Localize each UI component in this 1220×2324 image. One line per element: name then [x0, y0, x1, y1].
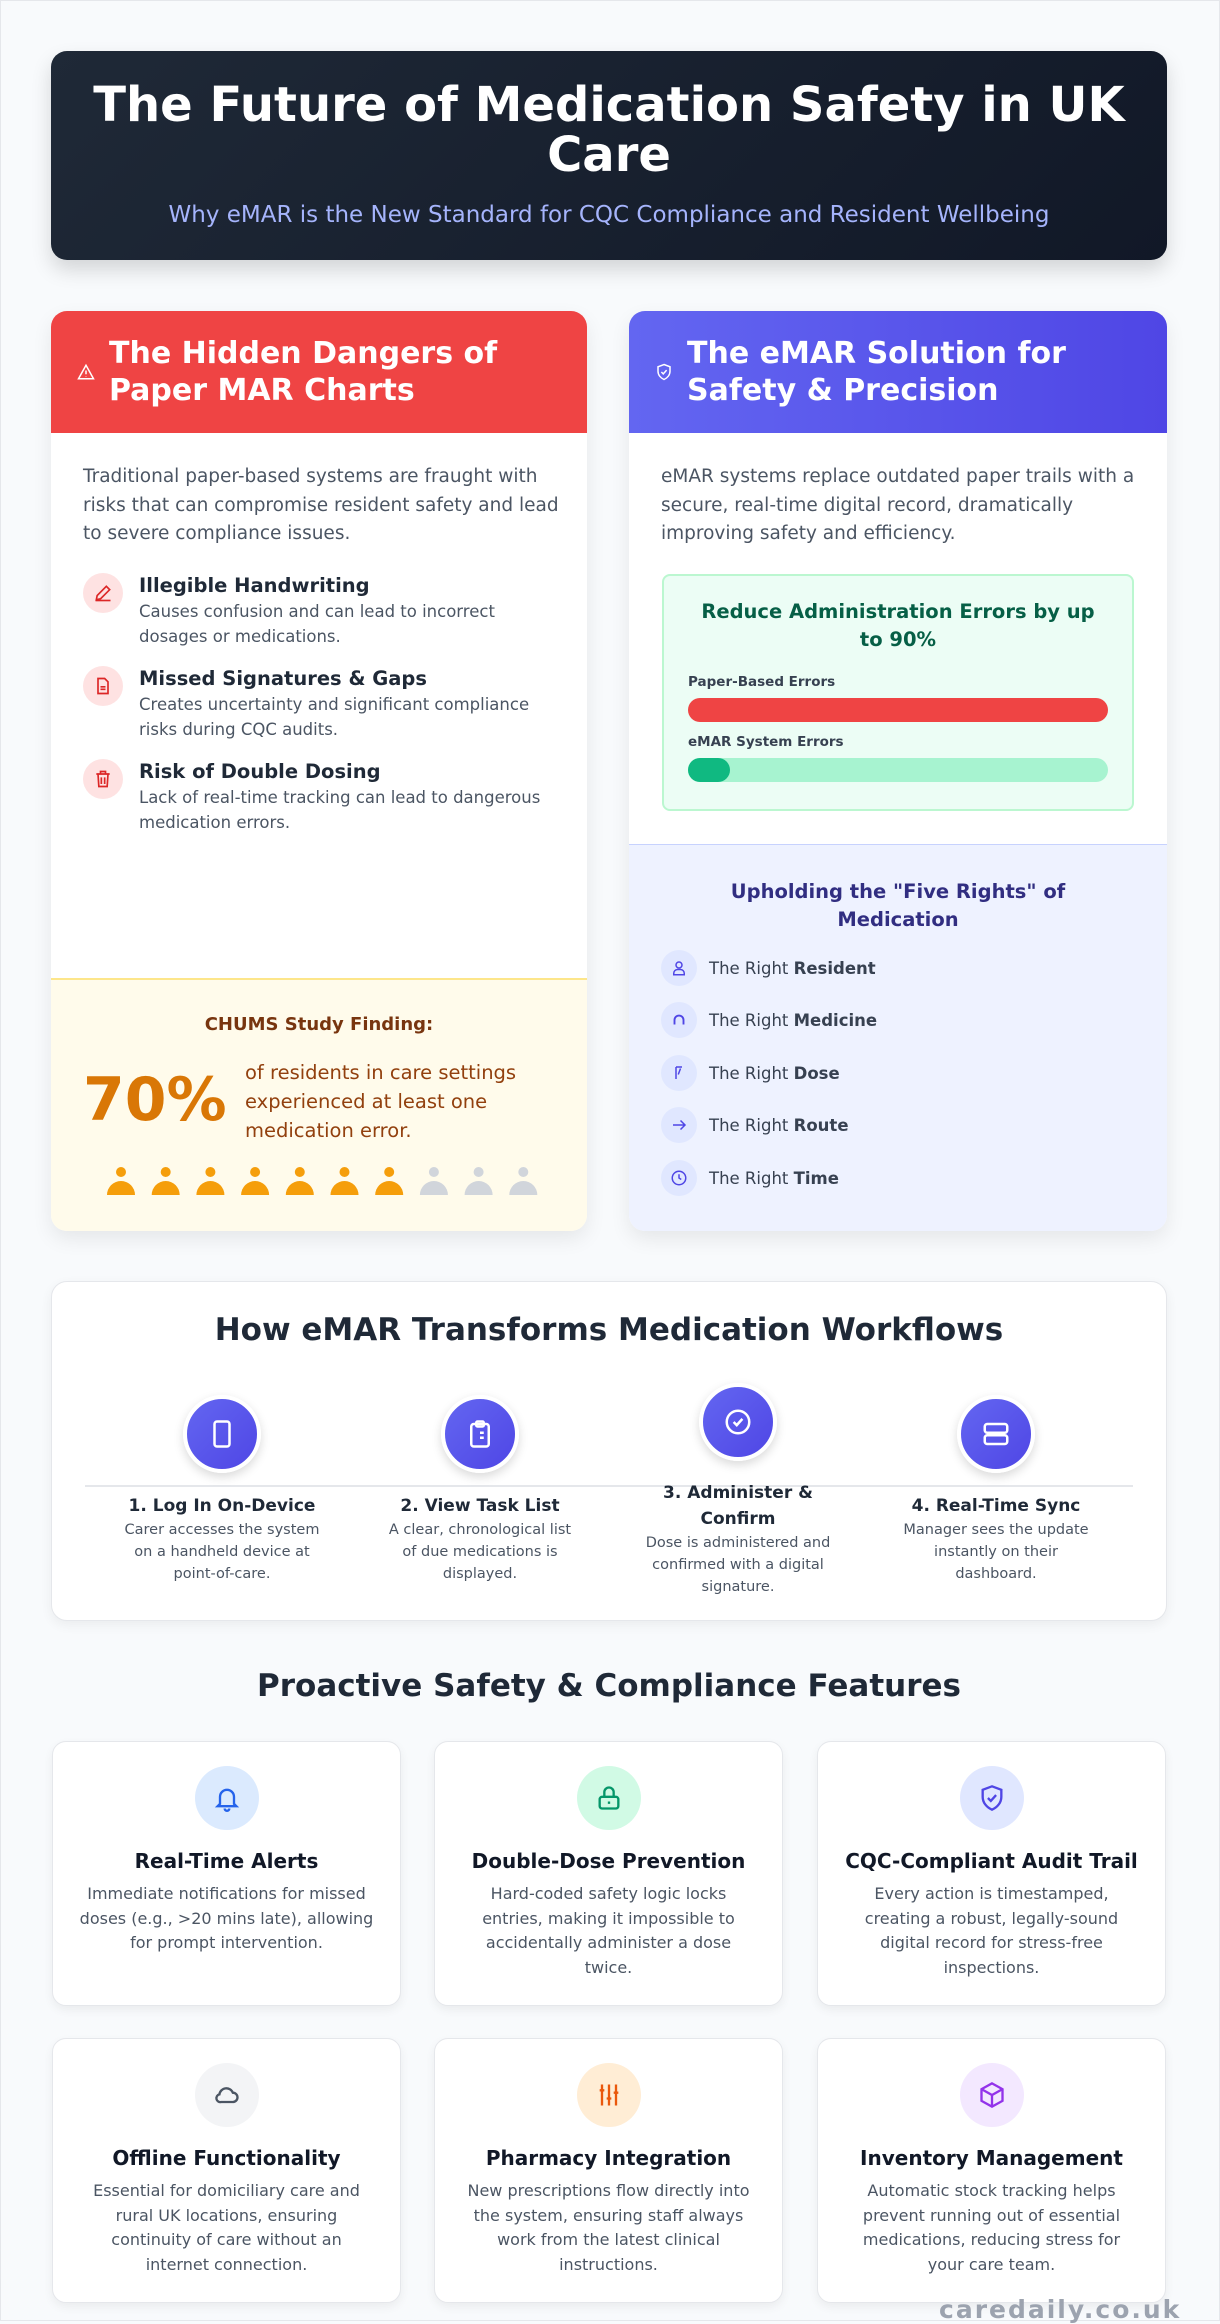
- right: time: The Right: [709, 1168, 788, 1188]
- step 3: Confirm: [701, 1509, 775, 1529]
- right: dose: Dose: [794, 1064, 840, 1082]
- feature: real-time alerts: [52, 1741, 401, 2006]
- feature: inventory: your care team.: [928, 2254, 1055, 2274]
- stat description: of residents in care settings experienced at least one medication error.: [245, 1061, 516, 1142]
- bar: eMAR: eMAR System Errors: [688, 734, 844, 750]
- panel: dangers of paper MAR: [51, 311, 587, 1231]
- item: missed signatures: [83, 666, 529, 739]
- step 3: 3. Administer &: [663, 1483, 813, 1503]
- section: five rights: [629, 844, 1167, 1231]
- panel: eMAR solution: [629, 311, 1167, 1231]
- feature: audit trail: digital record for stress-free: [880, 1933, 1103, 1952]
- feature: double-dose prevention: Hard-coded safety logic locks: [491, 1884, 726, 1903]
- step 3: [646, 1387, 830, 1595]
- bar: paper-based: Paper-Based Errors: [688, 674, 835, 690]
- step 3: Dose is administered and confirmed with a digital signature.: [646, 1535, 830, 1595]
- step 2: A clear, chronological list of due medications is displayed.: [389, 1522, 571, 1582]
- panel header: dangers: [51, 311, 587, 433]
- feature: offline: rural UK locations, ensuring: [116, 2206, 337, 2224]
- section title: Upholding the "Five Rights" of Medication: [731, 880, 1065, 931]
- feature: offline: continuity of care without an: [111, 2230, 342, 2249]
- feature: pharmacy integration: instructions.: [559, 2254, 658, 2274]
- feature: inventory: medications, reducing stress for: [863, 2230, 1120, 2249]
- right: dose: The Right: [709, 1064, 788, 1082]
- intro text: eMAR systems replace outdated paper trails with a secure, real-time digital record, dramatically improving safety and efficiency.: [661, 466, 1134, 544]
- feature: offline: internet connection.: [146, 2254, 307, 2274]
- step 1: 1. Log In On-Device: [129, 1496, 315, 1516]
- chart title: to 90%: [860, 628, 936, 651]
- item: illegible handwriting: [83, 573, 495, 646]
- callout heading: CHUMS Study Finding:: [205, 1014, 433, 1035]
- feature: real-time alerts: Immediate notifications for missed: [87, 1884, 366, 1903]
- title: The Future of Medication Safety in UK Care: [93, 77, 1125, 183]
- panel: workflow: [51, 1281, 1167, 1621]
- right: time: [661, 1160, 839, 1196]
- watermark: caredaily.co.uk: [939, 2295, 1181, 2324]
- panel header: dangers: Paper MAR Charts: [109, 373, 415, 408]
- item: missed signatures: Missed Signatures & Gaps: [139, 667, 427, 690]
- header banner: [51, 51, 1167, 260]
- feature: inventory: Automatic stock tracking helps: [867, 2181, 1116, 2200]
- feature: audit trail: inspections.: [944, 1958, 1039, 1976]
- right: dose: [661, 1055, 840, 1091]
- step 4: 4. Real-Time Sync: [912, 1496, 1080, 1516]
- chart title: Reduce Administration Errors by up: [701, 600, 1095, 623]
- stat: 70%: 70%: [83, 1065, 227, 1135]
- right: medicine: Medicine: [794, 1010, 877, 1030]
- feature: inventory: prevent running out of essential: [863, 2206, 1120, 2224]
- right: medicine: The Right: [709, 1010, 788, 1030]
- panel header: dangers: The Hidden Dangers of: [109, 336, 497, 371]
- right: route: [661, 1107, 849, 1143]
- right: resident: [661, 950, 876, 986]
- pictogram: 7 of 10 people: [107, 1167, 538, 1195]
- feature: inventory: Inventory Management: [860, 2146, 1123, 2170]
- feature: real-time alerts: for prompt intervention.: [130, 1933, 323, 1952]
- item: illegible handwriting: Illegible Handwriting: [139, 574, 370, 597]
- item: illegible handwriting: Causes confusion and can lead to incorrect dosages or medications.: [139, 602, 495, 646]
- right: medicine: [661, 1002, 877, 1038]
- feature: double-dose prevention: twice.: [585, 1958, 632, 1976]
- right: resident: The Right: [709, 958, 788, 978]
- feature: offline: Offline Functionality: [112, 2146, 341, 2170]
- feature: audit trail: creating a robust, legally-sound: [865, 1908, 1118, 1928]
- callout: CHUMS study: [51, 978, 587, 1231]
- feature: pharmacy integration: work from the latest clinical: [497, 2230, 720, 2249]
- intro text: Traditional paper-based systems are fraught with risks that can compromise resident safety and lead to severe compliance issues.: [83, 466, 559, 544]
- feature: audit trail: [817, 1741, 1166, 2006]
- bar: eMAR: [688, 734, 1108, 782]
- item: missed signatures: Creates uncertainty and significant compliance risks during CQC audits.: [139, 695, 529, 739]
- feature: real-time alerts: doses (e.g., >20 mins late), allowing: [80, 1908, 373, 1928]
- feature: double-dose prevention: [434, 1741, 783, 2006]
- panel header: solution: Safety & Precision: [687, 373, 998, 408]
- feature: double-dose prevention: accidentally administer a dose: [486, 1933, 731, 1952]
- right: route: Route: [794, 1116, 849, 1134]
- bar: paper-based: [688, 674, 1108, 722]
- feature: real-time alerts: Real-Time Alerts: [135, 1849, 318, 1873]
- feature: pharmacy integration: [434, 2038, 783, 2303]
- feature: pharmacy integration: New prescriptions flow directly into: [467, 2181, 750, 2200]
- feature: pharmacy integration: Pharmacy Integration: [486, 2146, 731, 2170]
- step 4: Manager sees the update instantly on their dashboard.: [903, 1522, 1089, 1582]
- right: time: Time: [794, 1168, 839, 1188]
- features heading: Proactive Safety & Compliance Features: [257, 1668, 961, 1704]
- feature: inventory: [817, 2038, 1166, 2303]
- feature: offline: Essential for domiciliary care and: [93, 2181, 360, 2200]
- step 2: [389, 1399, 571, 1582]
- subtitle: Why eMAR is the New Standard for CQC Compliance and Resident Wellbeing: [169, 202, 1049, 228]
- feature: offline: [52, 2038, 401, 2303]
- panel header: solution: [629, 311, 1167, 433]
- feature: pharmacy integration: the system, ensuring staff always: [474, 2206, 743, 2224]
- right: route: The Right: [709, 1116, 788, 1134]
- step 1: [125, 1399, 319, 1582]
- feature: double-dose prevention: Double-Dose Prevention: [472, 1849, 745, 1873]
- feature: audit trail: CQC-Compliant Audit Trail: [845, 1849, 1138, 1873]
- chart title: [701, 600, 1095, 651]
- right: resident: Resident: [794, 958, 876, 978]
- feature: audit trail: Every action is timestamped,: [874, 1884, 1109, 1903]
- step 2: 2. View Task List: [400, 1496, 560, 1516]
- item: double dosing: [83, 759, 540, 832]
- step 4: [903, 1399, 1089, 1582]
- item: double dosing: Risk of Double Dosing: [139, 760, 381, 783]
- step 1: Carer accesses the system on a handheld device at point-of-care.: [125, 1522, 319, 1582]
- chart: error reduction: [662, 574, 1134, 811]
- panel header: solution: The eMAR Solution for: [687, 336, 1066, 371]
- feature: double-dose prevention: entries, making it impossible to: [482, 1908, 735, 1928]
- workflow title: How eMAR Transforms Medication Workflows: [215, 1312, 1003, 1348]
- item: double dosing: Lack of real-time tracking can lead to dangerous medication errors.: [139, 788, 540, 832]
